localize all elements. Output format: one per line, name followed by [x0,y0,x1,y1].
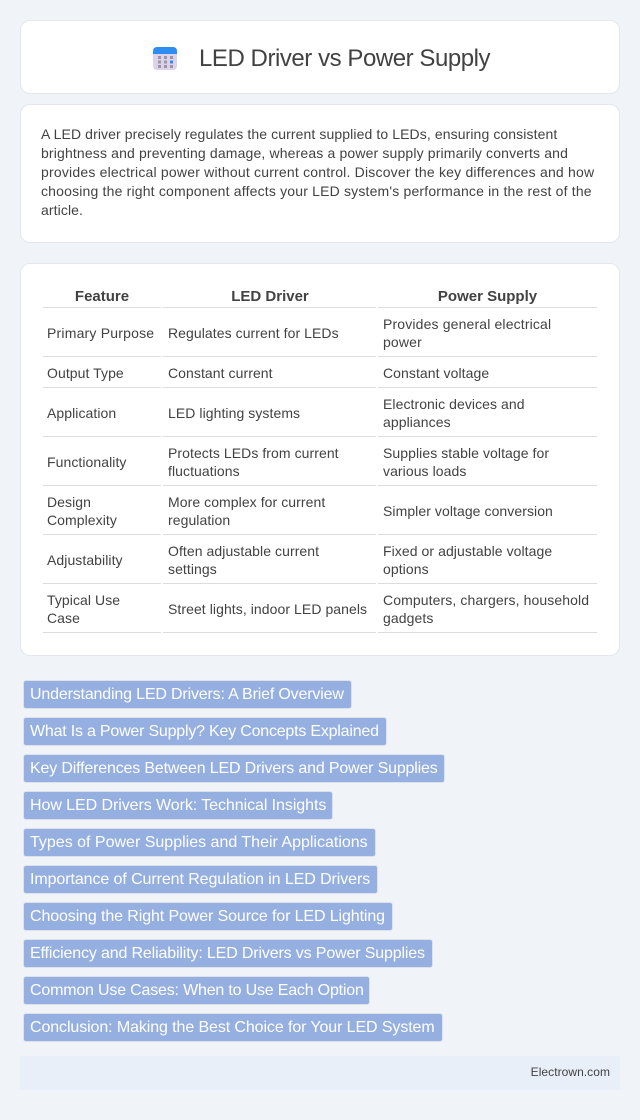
row: design complexity [47,494,553,528]
topic link 5 [23,828,376,857]
topic link 10: Conclusion: Making the Best Choice for Your LED System [30,1019,435,1036]
footer source: Electrown.com [531,1065,610,1079]
row: primary purpose: Primary Purpose [47,325,154,341]
row: functionality: Supplies stable voltage for [383,445,549,461]
row: application: LED lighting systems [168,405,300,421]
row: design complexity: More complex for current [168,494,325,510]
row: primary purpose: Regulates current for LEDs [168,325,339,341]
row: application: Electronic devices and [383,396,525,412]
row: output type: Constant voltage [383,365,489,381]
intro paragraph: brightness and preventing damage, whereas a power supply primarily converts and [41,145,568,161]
topic link 7 [23,902,393,931]
row: typical use case [47,592,589,626]
row: typical use case: Case [47,610,80,626]
row: adjustability: Fixed or adjustable voltage [383,543,552,559]
topic link 6 [23,865,378,894]
row: typical use case: Street lights, indoor LED panels [168,601,367,617]
table header: LED Driver [231,288,309,305]
row: primary purpose: Provides general electrical [383,316,551,332]
intro paragraph: choosing the right component affects your LED system's performance in the rest of the [41,183,592,199]
row: design complexity: Simpler voltage conversion [383,503,553,519]
topic link 9 [23,976,370,1005]
topic link 3: Key Differences Between LED Drivers and Power Supplies [30,760,438,777]
row: output type: Constant current [168,365,273,381]
row: output type: Output Type [47,365,124,381]
row: typical use case: gadgets [383,610,434,626]
row: design complexity: Design [47,494,91,510]
intro paragraph: A LED driver precisely regulates the current supplied to LEDs, ensuring consistent [41,126,557,142]
row: functionality: Functionality [47,454,127,470]
row: application: Application [47,405,116,421]
row: adjustability: Adjustability [47,552,123,568]
row: output type [47,365,489,381]
row: design complexity: regulation [168,512,230,528]
topic link 6: Importance of Current Regulation in LED Drivers [30,871,370,888]
topic link 7: Choosing the Right Power Source for LED Lighting [30,908,385,925]
intro paragraph [41,126,594,218]
row: adjustability: Often adjustable current [168,543,319,559]
row: design complexity: Complexity [47,512,117,528]
intro paragraph: article. [41,202,83,218]
icon: calendar [153,47,177,70]
row: functionality [47,445,549,479]
panel: intro text [20,104,620,243]
intro paragraph: provides electrical power without current control. Discover the key differences and how [41,164,594,180]
topic link 4 [23,791,333,820]
row: functionality: various loads [383,463,466,479]
row: adjustability: settings [168,561,217,577]
row: typical use case: Typical Use [47,592,120,608]
table header: Feature [75,288,129,305]
topic link 8 [23,939,433,968]
topic link 4: How LED Drivers Work: Technical Insights [30,797,326,814]
topic link 9: Common Use Cases: When to Use Each Option [30,982,364,999]
row: adjustability [47,543,552,577]
row: application: appliances [383,414,451,430]
row: adjustability: options [383,561,429,577]
footer [20,1056,620,1090]
title card [20,20,620,94]
row: typical use case: Computers, chargers, household [383,592,589,608]
row: primary purpose: power [383,334,422,350]
row: primary purpose [47,316,551,350]
topic link 1 [23,680,352,709]
topic link 2: What Is a Power Supply? Key Concepts Explained [30,723,379,740]
row: functionality: Protects LEDs from current [168,445,339,461]
topic link 8: Efficiency and Reliability: LED Drivers vs Power Supplies [30,945,425,962]
table header: Power Supply [438,288,537,305]
topic link 1: Understanding LED Drivers: A Brief Overview [30,686,344,703]
topic link 3 [23,754,445,783]
row: functionality: fluctuations [168,463,240,479]
panel: comparison table [20,263,620,656]
topic link 5: Types of Power Supplies and Their Applications [30,834,368,851]
table header [75,288,537,305]
topic link 2 [23,717,387,746]
topic link 10 [23,1013,443,1042]
title: LED Driver vs Power Supply [199,45,490,72]
row: application [47,396,525,430]
